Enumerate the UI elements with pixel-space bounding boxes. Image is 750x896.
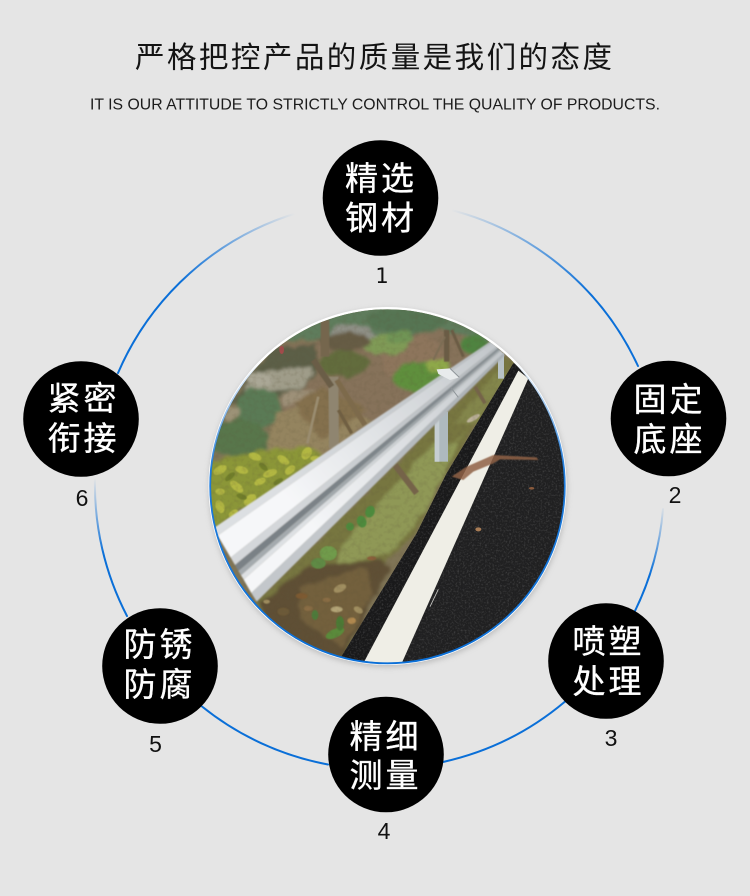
grass below rail bbox=[257, 357, 514, 610]
photo shadow bbox=[209, 309, 567, 667]
left green bush bbox=[236, 388, 281, 428]
green weeds bbox=[311, 504, 376, 641]
label 4: 精细 bbox=[350, 718, 422, 755]
wooden posts and struts bbox=[307, 320, 485, 493]
brown brush bbox=[278, 328, 469, 392]
steel posts bbox=[435, 412, 448, 462]
tree crown bbox=[318, 349, 368, 377]
badge 2 bbox=[611, 361, 726, 476]
step 5 bbox=[102, 608, 218, 757]
blue connecting ring bbox=[95, 207, 663, 764]
number 3: 3 bbox=[605, 725, 617, 751]
photo white frame bbox=[208, 307, 566, 665]
yellow-green shrub bbox=[207, 447, 323, 527]
number 6: 6 bbox=[76, 485, 88, 511]
badge 3 bbox=[548, 603, 664, 719]
step 6 bbox=[23, 361, 139, 511]
far trees bbox=[286, 309, 490, 342]
pond bbox=[230, 345, 317, 403]
photo scene bbox=[200, 300, 575, 670]
label 5: 防锈 bbox=[124, 626, 196, 663]
step 2 bbox=[611, 361, 726, 508]
road debris bbox=[452, 455, 538, 480]
road-edge fallen leaves bbox=[263, 413, 481, 624]
label 1: 钢材 bbox=[345, 200, 417, 236]
small red leaves bbox=[279, 346, 284, 354]
asphalt bbox=[338, 363, 575, 670]
central photo: guardrail beside road bbox=[200, 300, 575, 670]
number 4: 4 bbox=[378, 818, 391, 844]
guardrail beam bbox=[213, 341, 505, 602]
label 5: 防腐 bbox=[124, 666, 196, 703]
label 2: 底座 bbox=[634, 421, 706, 458]
label 6: 衔接 bbox=[48, 420, 120, 457]
label 3: 处理 bbox=[572, 663, 644, 700]
label 2: 固定 bbox=[634, 381, 706, 418]
photo blue rim bbox=[210, 309, 565, 663]
title: 严格把控产品的质量是我们的态度 bbox=[135, 42, 612, 74]
shrub leaves bbox=[212, 445, 320, 519]
label 3: 喷塑 bbox=[572, 623, 644, 660]
dry grass bbox=[266, 407, 371, 454]
badge 1 bbox=[323, 140, 438, 256]
badge 5 bbox=[102, 608, 218, 724]
label 1: 精选 bbox=[345, 160, 417, 197]
step 3 bbox=[548, 603, 664, 751]
white road line bbox=[363, 371, 528, 663]
right bushes bbox=[393, 362, 447, 393]
rail joint and bracket bbox=[437, 368, 459, 380]
label 4: 测量 bbox=[350, 757, 422, 794]
step 4 bbox=[328, 697, 444, 844]
number 2: 2 bbox=[669, 482, 681, 508]
label 6: 紧密 bbox=[48, 380, 120, 417]
bank bbox=[280, 390, 317, 407]
badge 4 bbox=[328, 697, 444, 812]
badge 6 bbox=[23, 361, 139, 477]
subtitle: IT IS OUR ATTITUDE TO STRICTLY CONTROL THE QUALITY OF PRODUCTS. bbox=[90, 96, 660, 114]
number 5: 5 bbox=[149, 731, 162, 757]
number 1: 1 bbox=[375, 264, 389, 288]
step 1 bbox=[323, 140, 438, 288]
